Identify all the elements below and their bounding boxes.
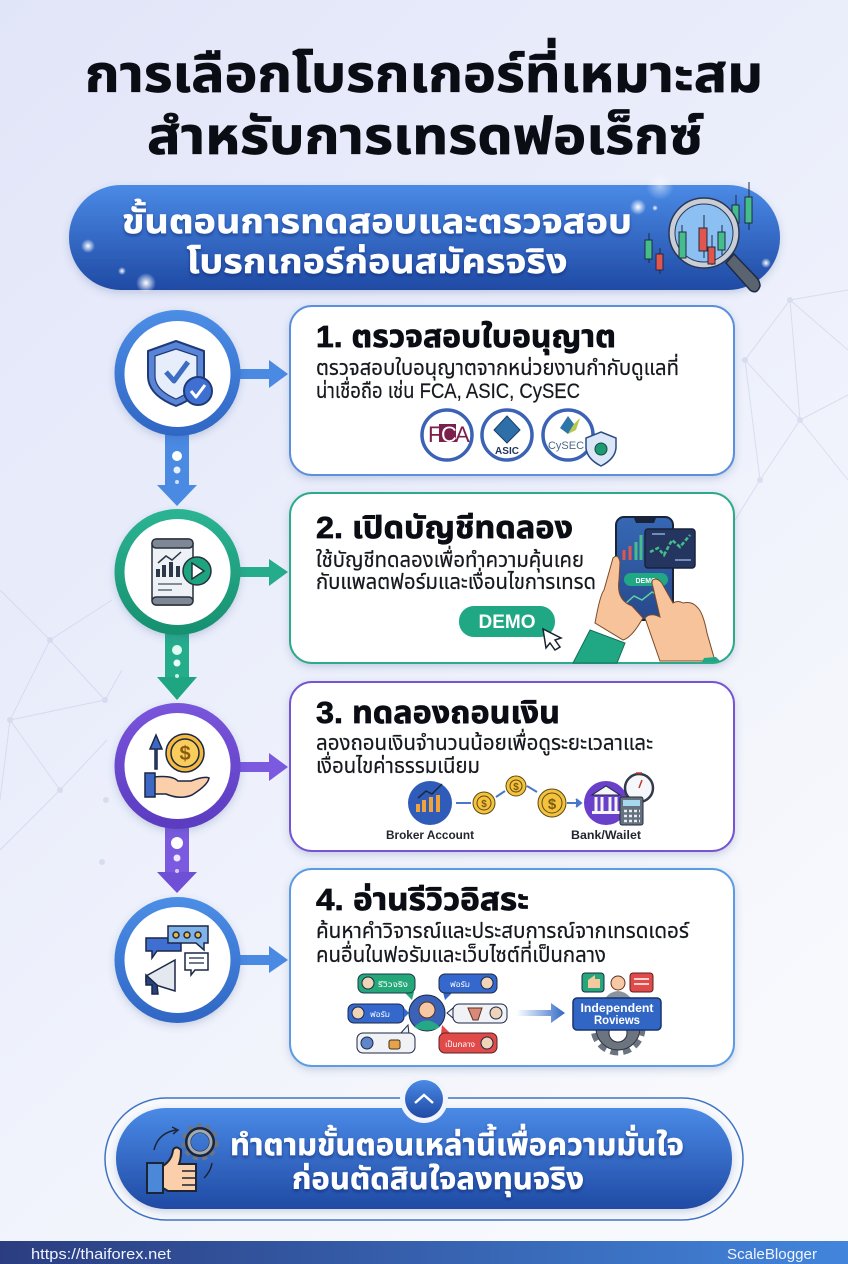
bubble: red	[439, 1025, 497, 1053]
bubble: blue top	[439, 974, 497, 1000]
center person	[409, 995, 445, 1031]
card 3 body: ลองถอนเงินจำนวนน้อยเพื่อดูระยะเวลาและ	[316, 728, 653, 756]
demo button	[459, 606, 561, 650]
chevron badge	[400, 1075, 448, 1123]
step 2 icon circle	[114, 509, 288, 635]
logo: FCA	[422, 410, 472, 460]
banner heading: โบรกเกอร์ก่อนสมัครจริง	[186, 243, 568, 281]
icon: magnifier with candlesticks	[645, 182, 760, 292]
card 3 body	[316, 728, 653, 778]
card 4 heading: 4. อ่านรีวิวอิสระ	[316, 882, 529, 917]
card 2 heading: 2. เปิดบัญชีทดลอง	[316, 510, 573, 545]
banner heading: ขั้นตอนการทดสอบและตรวจสอบ	[122, 198, 632, 241]
card 1 body: ตรวจสอบใบอนุญาตจากหน่วยงานกำกับดูแลที่	[316, 353, 679, 381]
independent reviews badge: Independent	[580, 1003, 654, 1015]
conclusion pill	[105, 1075, 743, 1220]
bank wallet node	[571, 773, 653, 842]
step 4 icon circle	[114, 897, 288, 1023]
title	[85, 38, 763, 166]
network pattern left	[0, 590, 122, 865]
arrow	[516, 1003, 565, 1023]
step 3 connector	[157, 825, 197, 893]
card 3 heading: 3. ทดลองถอนเงิน	[316, 695, 560, 730]
bubble: red: เป็นกลาง	[445, 1040, 475, 1049]
card 4 body: คนอื่นในฟอรัมและเว็บไซต์ที่เป็นกลาง	[316, 940, 606, 967]
bank wallet node: Bank/Wailet	[571, 828, 641, 842]
logo: CySEC: CySEC	[548, 440, 584, 452]
icon: phone demo play	[152, 539, 211, 605]
conclusion text: ก่อนตัดสินใจลงทุนจริง	[292, 1163, 584, 1197]
logo: FCA: C	[441, 422, 457, 447]
footer brand: ScaleBlogger	[727, 1246, 817, 1263]
diagram: review bubbles	[348, 974, 565, 1053]
step 1 connector	[157, 432, 197, 506]
card 4: independent reviews	[290, 869, 734, 1066]
card 1: license check	[290, 306, 734, 475]
broker account node	[386, 781, 474, 842]
icon: coin and hand: $	[179, 743, 191, 765]
icon: thumbs up with gear	[147, 1126, 216, 1193]
conclusion text	[230, 1123, 684, 1197]
step 1 icon circle	[114, 310, 288, 436]
banner sparkles	[81, 172, 771, 293]
independent reviews badge	[573, 973, 661, 1053]
card 2: demo account	[290, 493, 734, 663]
logo: CySEC	[543, 410, 616, 466]
logo: ASIC	[482, 410, 532, 460]
bubble: grey left	[357, 1025, 415, 1053]
logo: FCA: A	[455, 422, 470, 447]
bubble: green: รีวิวจริง	[377, 979, 408, 989]
icon: shield check	[148, 341, 212, 406]
card 4 body: ค้นหาคำวิจารณ์และประสบการณ์จากเทรดเดอร์	[316, 919, 690, 943]
coins: $	[513, 782, 519, 793]
logo: FCA: F	[428, 422, 441, 447]
footer bar	[0, 1241, 848, 1264]
broker account node: Broker Account	[386, 828, 474, 842]
icon: reviews and megaphone	[146, 926, 208, 994]
bubble: blue left: ฟอรัม	[370, 1010, 390, 1019]
card 2 body	[316, 545, 596, 594]
card 2 body: ใช้บัญชีทดลองเพื่อทำความคุ้นเคย	[316, 545, 584, 573]
coins: $	[481, 799, 487, 810]
card 4 body	[316, 919, 690, 967]
title: สำหรับการเทรดฟอเร็กซ์	[147, 108, 704, 166]
footer url: https://thaiforex.net	[31, 1246, 172, 1263]
step 3 icon circle	[114, 703, 288, 829]
card 2 body: กับแพลตฟอร์มและเงื่อนไขการเทรด	[316, 567, 596, 594]
conclusion text: ทำตามขั้นตอนเหล่านี้เพื่อความมั่นใจ	[230, 1123, 684, 1162]
coin flow arrows	[456, 786, 581, 807]
icon: cursor	[543, 629, 561, 650]
diagram: broker to bank flow	[386, 773, 653, 842]
card 1 body: น่าเชื่อถือ เช่น FCA, ASIC, CySEC	[316, 376, 580, 403]
card 3: withdrawal test	[290, 682, 734, 851]
coins: $	[548, 796, 557, 813]
card 1 heading: 1. ตรวจสอบใบอนุญาต	[316, 319, 616, 355]
step 2 connector	[157, 630, 197, 700]
illustration: hands with phone	[573, 517, 721, 663]
independent reviews badge: Roviews	[594, 1015, 640, 1027]
illustration: hands with phone: DEMO	[636, 578, 657, 585]
icon: coin and hand	[145, 734, 209, 797]
banner heading	[122, 198, 632, 281]
bubble: blue left	[348, 1004, 409, 1023]
demo button: DEMO	[478, 612, 536, 633]
bubble: blue top: ฟอรัม	[450, 980, 470, 989]
coins	[473, 776, 566, 817]
bubble: grey right	[447, 1004, 507, 1023]
card 3 body: เงื่อนไขค่าธรรมเนียม	[316, 751, 480, 778]
network pattern right	[735, 290, 848, 520]
title: การเลือกโบรกเกอร์ที่เหมาะสม	[85, 38, 763, 104]
logo: ASIC: ASIC	[495, 446, 519, 457]
card 1 body	[316, 353, 679, 403]
banner	[69, 172, 780, 293]
bubble: green	[358, 974, 415, 1000]
